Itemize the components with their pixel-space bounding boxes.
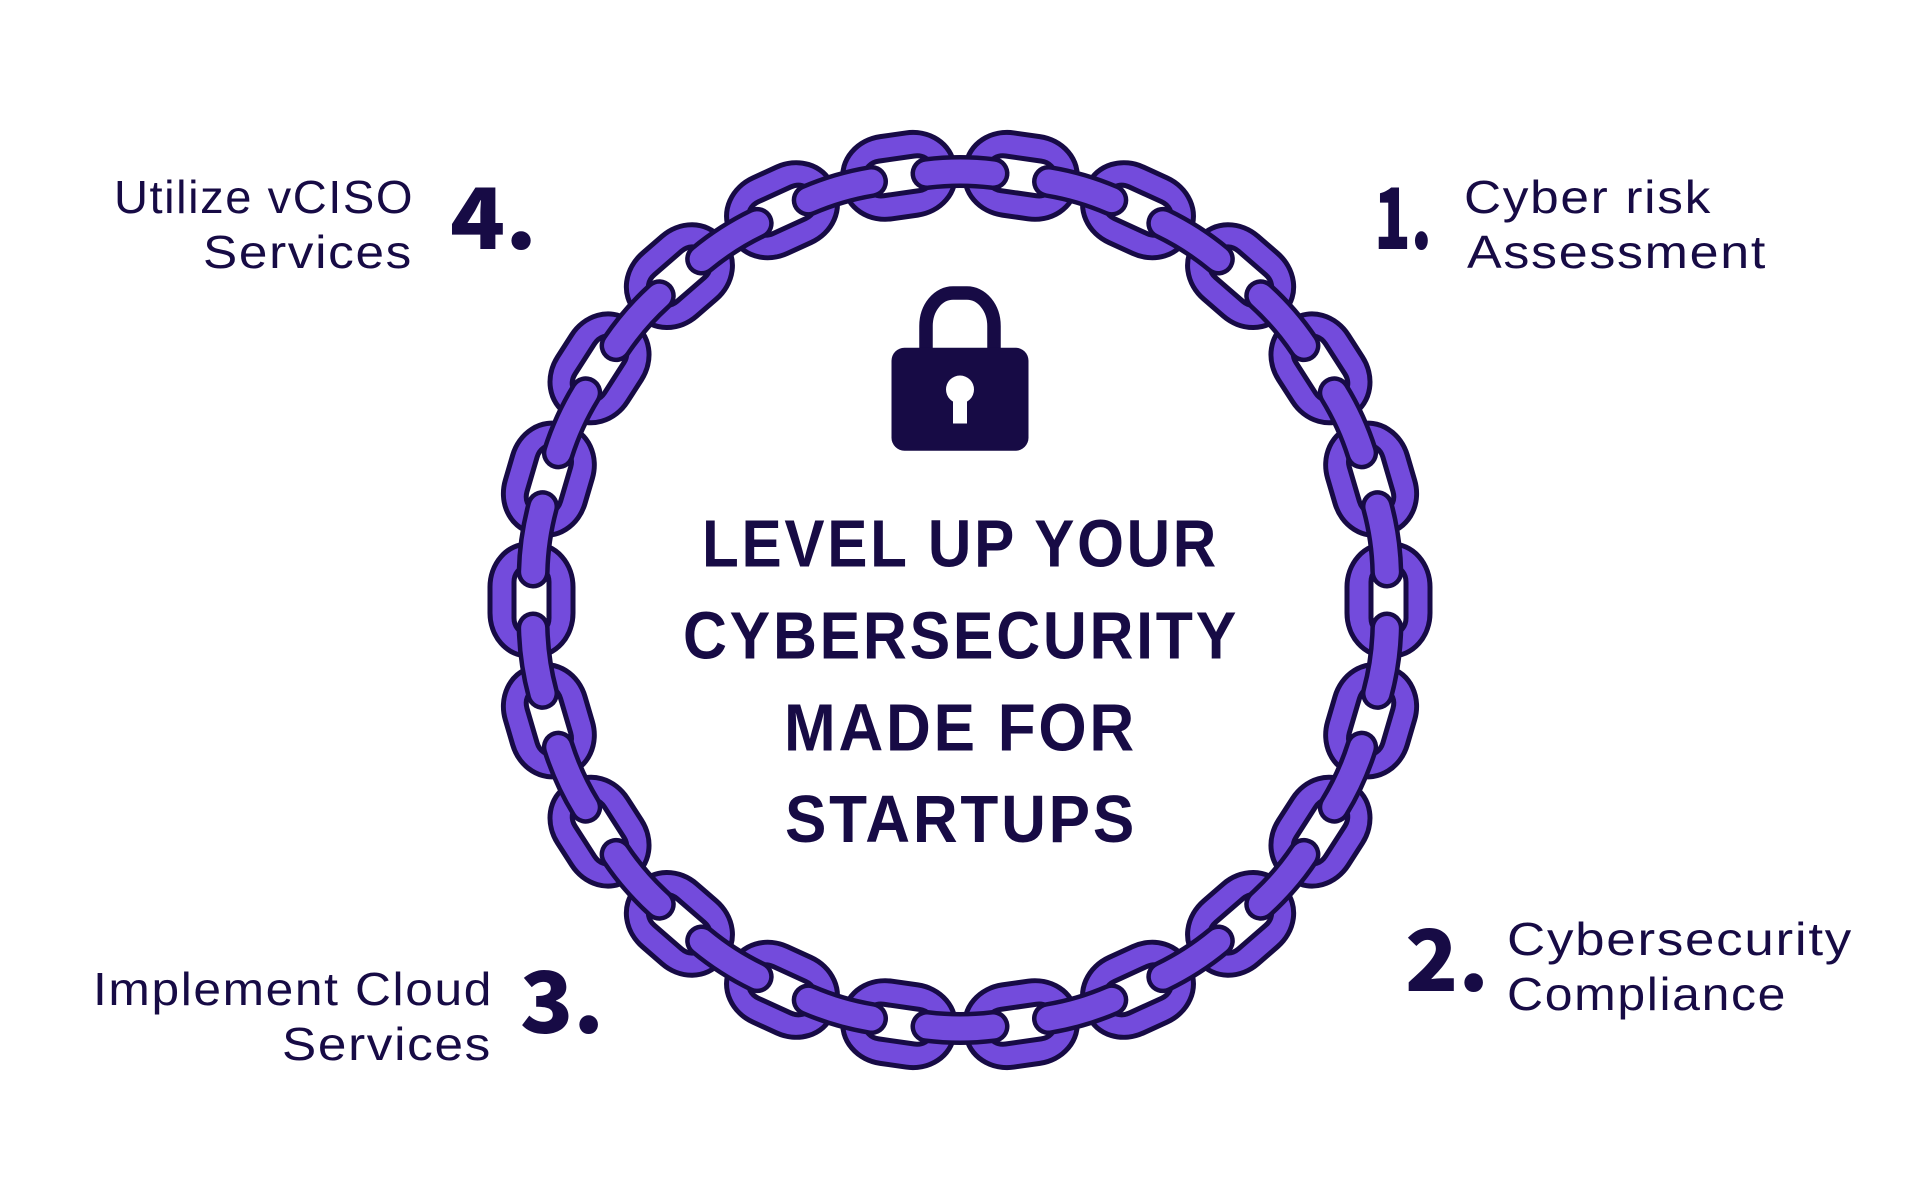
item 2: cybersecurity compliance: 2. <box>1405 893 1489 1016</box>
item 2: cybersecurity compliance <box>1405 893 1853 1020</box>
title: STARTUPS <box>785 782 1137 857</box>
item 1: cyber risk assessment <box>1374 151 1767 278</box>
title: MADE FOR <box>784 690 1137 766</box>
item 3: implement cloud services <box>93 935 604 1070</box>
item 1: cyber risk assessment: 1. <box>1374 151 1432 274</box>
edge-on chain links <box>531 172 1389 1028</box>
item 3: implement cloud services: Services <box>282 1018 492 1070</box>
item 4: utilize vCISO services: 4. <box>450 151 537 274</box>
item 2: cybersecurity compliance: Compliance <box>1507 968 1787 1020</box>
item 4: utilize vCISO services: Utilize vCISO <box>114 171 414 223</box>
title: LEVEL UP YOUR <box>702 506 1219 582</box>
item 1: cyber risk assessment: Cyber risk <box>1464 171 1712 223</box>
open chain links <box>490 127 1430 1073</box>
item 3: implement cloud services: Implement Cloud <box>93 963 493 1015</box>
item 4: utilize vCISO services <box>114 151 537 278</box>
item 2: cybersecurity compliance: Cybersecurity <box>1507 913 1853 965</box>
item 1: cyber risk assessment: Assessment <box>1467 226 1767 278</box>
item 3: implement cloud services: 3. <box>520 935 604 1058</box>
item 4: utilize vCISO services: Services <box>203 226 413 278</box>
title <box>683 506 1239 857</box>
chain ring <box>490 127 1430 1073</box>
icon: padlock <box>892 293 1028 451</box>
title: CYBERSECURITY <box>683 598 1239 674</box>
